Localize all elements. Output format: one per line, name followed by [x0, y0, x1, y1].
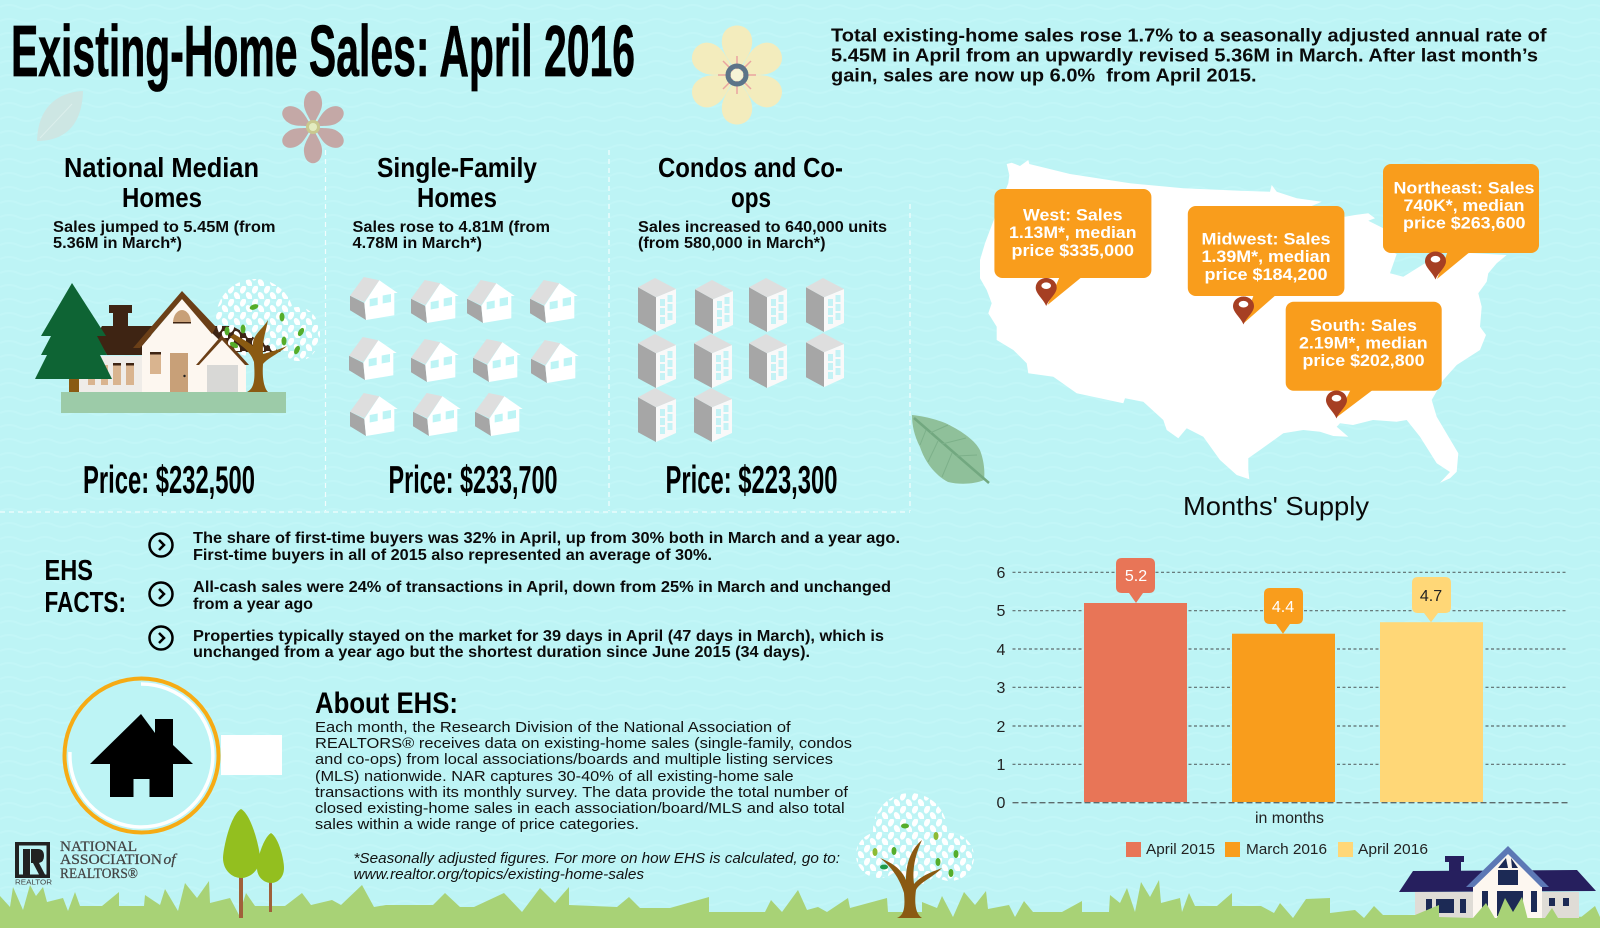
text: national sales: Sales jumped to 5.45M (from	[53, 219, 276, 236]
bar: April 2016	[1380, 577, 1483, 802]
price: condos: Price: $223,300	[666, 459, 838, 502]
callout: West: price $335,000	[1012, 241, 1134, 260]
icon: house scene	[61, 291, 286, 413]
gridlines and y axis: 5	[997, 603, 1006, 620]
bar: March 2016	[1232, 588, 1335, 802]
icon: arrow circle 2	[150, 582, 172, 606]
text: condo sales	[638, 219, 887, 252]
intro paragraph	[831, 26, 1548, 86]
footnote: www.realtor.org/topics/existing-home-sales	[354, 866, 645, 883]
text: national sales: 5.36M in March*)	[53, 235, 182, 252]
icon: arrow circle 3	[150, 626, 172, 650]
chart title: Months' Supply	[1183, 491, 1369, 521]
text: about paragraph: sales within a wide range of price categories.	[315, 816, 639, 833]
text: about paragraph: closed existing-home sales in each association/board/MLS and also total	[315, 800, 845, 817]
map of the United States	[980, 160, 1507, 483]
panel: condos and co-ops	[638, 152, 887, 502]
text: about paragraph: REALTORS® receives data on existing-home sales (single-family, condos	[315, 735, 852, 752]
callout: West	[994, 189, 1151, 306]
text: about paragraph: transactions with its monthly survey. The data provide the total number of	[315, 784, 849, 801]
heading: condos: Condos and Co-	[658, 152, 843, 183]
dashed dividers	[0, 150, 910, 512]
logo: National Association of Realtors: REALTOR	[15, 878, 53, 886]
text: national sales	[53, 219, 276, 252]
callout: South: price $202,800	[1302, 351, 1424, 370]
fact 2: from a year ago	[193, 596, 313, 613]
fact 2: All-cash sales were 24% of transactions in April, down from 25% in March and unchanged	[193, 579, 891, 596]
heading: EHS facts	[44, 555, 126, 619]
title: Existing-Home Sales: April 2016	[11, 12, 635, 92]
icon: blossom tree	[216, 279, 320, 392]
intro paragraph: 5.45M in April from an upwardly revised 5.36M in March. After last month’s	[831, 46, 1538, 66]
gridlines and y axis: 0	[997, 795, 1006, 812]
text: about paragraph: and co-ops) from local associations/boards and multiple listing services	[315, 751, 833, 768]
intro paragraph: gain, sales are now up 6.0% from April 2015.	[831, 66, 1256, 86]
footnote: *Seasonally adjusted figures. For more on how EHS is calculated, go to:	[354, 850, 840, 867]
heading: condos: ops	[731, 182, 771, 213]
callout: West: West: Sales	[1023, 206, 1122, 225]
fact 1: The share of first-time buyers was 32% in April, up from 30% both in March and a year ago.	[193, 530, 900, 547]
footnote	[354, 850, 840, 883]
text: condo sales: Sales increased to 640,000 units	[638, 219, 887, 236]
heading: EHS facts: FACTS:	[44, 587, 126, 619]
callout: Northeast: price $263,600	[1403, 214, 1526, 233]
fact 2	[150, 579, 891, 613]
legend: April 2016	[1358, 841, 1428, 858]
pictogram: ten condo buildings	[638, 278, 844, 442]
heading: national median: Homes	[122, 182, 202, 213]
icon: cream flower	[687, 26, 787, 124]
icon: pale leaf	[37, 91, 83, 141]
fact 3	[150, 626, 884, 661]
callout: Midwest: price $184,200	[1204, 265, 1328, 284]
logo: National Association of Realtors: NATIONAL	[60, 839, 137, 855]
gridlines and y axis: 1	[997, 757, 1006, 774]
price: national: Price: $232,500	[83, 459, 255, 502]
gridlines and y axis: 2	[997, 719, 1006, 736]
icon: evergreen tree	[35, 283, 112, 392]
heading: national median: National Median	[64, 152, 259, 183]
heading: EHS facts: EHS	[44, 555, 93, 587]
bar: March 2016: 4.4	[1272, 599, 1294, 616]
callout: Midwest: Midwest: Sales	[1202, 230, 1330, 249]
fact 3: unchanged from a year ago but the shortest duration since June 2015 (34 days).	[193, 644, 810, 661]
heading: single-family	[377, 152, 537, 213]
bar: April 2015	[1084, 558, 1187, 802]
pictogram: eleven houses	[349, 277, 579, 436]
logo: National Association of Realtors: of	[164, 852, 178, 868]
legend: April 2015	[1146, 841, 1215, 858]
intro paragraph: Total existing-home sales rose 1.7% to a seasonally adjusted annual rate of	[831, 26, 1548, 46]
text: single-family sales	[352, 219, 550, 252]
text: about paragraph: (MLS) nationwide. NAR captures 30-40% of all existing-home sale	[315, 768, 794, 785]
gridlines and y axis: 3	[997, 680, 1006, 697]
panel: about EHS	[315, 687, 852, 833]
icon: arrow circle 1	[150, 534, 172, 556]
heading: single-family: Homes	[417, 182, 497, 213]
fact 1	[150, 530, 900, 564]
icon: green leaf	[912, 415, 989, 484]
logo: National Association of Realtors	[15, 839, 178, 886]
callout: Northeast: 740K*, median	[1404, 196, 1524, 215]
fact 3: Properties typically stayed on the market for 39 days in April (47 days in March), which is	[193, 628, 884, 645]
grass in front of navy house	[1380, 897, 1600, 928]
logo: National Association of Realtors: ASSOCIATION	[60, 852, 163, 868]
gridlines and y axis: 6	[997, 565, 1006, 582]
icon: twin green trees	[223, 809, 284, 918]
icon: navy roof house	[1399, 846, 1596, 918]
panel: single-family homes	[349, 152, 579, 502]
heading: about EHS: About EHS:	[315, 687, 458, 720]
callout: South: 2.19M*, median	[1299, 334, 1428, 353]
text: about paragraph: Each month, the Research Division of the National Association of	[315, 719, 792, 736]
callout: West: 1.13M*, median	[1009, 223, 1136, 242]
legend	[1126, 841, 1428, 858]
heading: single-family: Single-Family	[377, 152, 537, 183]
price: single-family: Price: $233,700	[388, 459, 558, 502]
bar: April 2015: 5.2	[1125, 568, 1147, 585]
callout: Midwest: 1.39M*, median	[1202, 247, 1330, 266]
panel: national median homes	[35, 152, 320, 502]
callout: South: South: Sales	[1310, 316, 1417, 335]
heading: condos	[658, 152, 843, 213]
logo: National Association of Realtors: REALTORS®	[60, 866, 138, 882]
text: condo sales: (from 580,000 in March*)	[638, 235, 826, 252]
callout: Northeast	[1383, 164, 1539, 280]
x axis label: in months	[1255, 810, 1324, 827]
fact 1: First-time buyers in all of 2015 also represented an average of 30%.	[193, 547, 712, 564]
text: about paragraph	[315, 719, 852, 833]
bar: April 2016: 4.7	[1420, 588, 1442, 605]
heading: national median	[64, 152, 259, 213]
text: single-family sales: Sales rose to 4.81M (from	[352, 219, 550, 236]
callout: South	[1286, 302, 1442, 418]
icon: magnifier ring with house	[64, 678, 282, 832]
icon: pink flower	[279, 91, 347, 163]
chart: months' supply	[997, 491, 1568, 858]
gridlines and y axis	[997, 565, 1568, 812]
icon: blossom tree bottom	[856, 793, 974, 918]
grass strip	[0, 880, 1600, 928]
callout: Midwest	[1188, 206, 1344, 324]
text: single-family sales: 4.78M in March*)	[352, 235, 482, 252]
callout: Northeast: Northeast: Sales	[1394, 178, 1534, 197]
legend: March 2016	[1246, 841, 1327, 858]
gridlines and y axis: 4	[997, 642, 1006, 659]
